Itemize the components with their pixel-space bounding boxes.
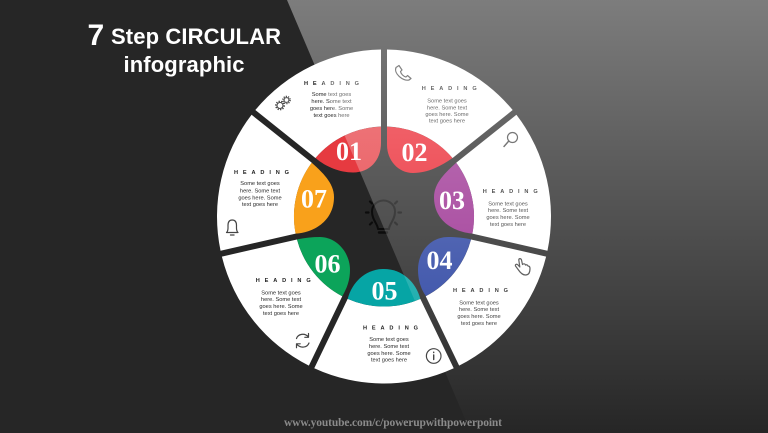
heading 05: HEADING	[363, 326, 418, 332]
panel: step 05	[293, 269, 454, 423]
heading 06: HEADING	[256, 278, 311, 284]
number 01: 01	[336, 137, 362, 166]
body text 01: here. Some text	[311, 99, 352, 105]
body text 03: here. Some text	[488, 208, 528, 214]
number 07: 07	[301, 184, 327, 214]
white segment 03	[432, 115, 595, 281]
heading 07: HEADING	[234, 170, 289, 176]
icon: phone	[396, 66, 411, 80]
footer url: www.youtube.com/c/powerupwithpowerpoint	[284, 417, 502, 429]
icon: magnifier	[504, 132, 518, 146]
title: infographic	[124, 52, 244, 77]
body text 02: here. Some text	[427, 106, 467, 112]
body text 06: here. Some text	[261, 297, 301, 303]
body text 03: goes here. Some	[486, 215, 530, 221]
number 02: 02	[402, 138, 428, 167]
title: Step CIRCULAR	[111, 24, 281, 49]
body text 05: here. Some text	[369, 344, 409, 350]
colored petal 02	[387, 127, 452, 173]
heading 04: HEADING	[453, 288, 508, 294]
body text 04: here. Some text	[459, 307, 499, 313]
white segment 04	[412, 232, 546, 379]
panel: step 04	[412, 232, 546, 379]
panel: step 01	[255, 12, 419, 178]
white segment 07	[193, 104, 326, 251]
body text 02: text goes here	[429, 118, 465, 124]
icon: gears	[276, 96, 290, 110]
body text 04: goes here. Some	[457, 314, 501, 320]
body text 02: Some text goes	[427, 98, 467, 104]
panel: step 06	[196, 213, 356, 366]
body text 06: text goes here	[263, 311, 299, 317]
icon: info	[426, 349, 441, 363]
title: 7	[88, 19, 104, 52]
heading 01: HEADING	[304, 81, 359, 87]
colored petal 05	[348, 269, 420, 307]
icon: central light bulb	[366, 200, 401, 232]
title	[88, 19, 281, 77]
body text 05: goes here. Some	[367, 351, 411, 357]
panel: step 03	[432, 115, 595, 281]
heading 03: HEADING	[483, 189, 538, 195]
icon: bell	[226, 220, 238, 235]
icon: refresh arrows	[296, 334, 309, 348]
number 04: 04	[426, 246, 452, 275]
body text 04: Some text goes	[459, 300, 499, 306]
white segment 02	[387, 50, 513, 158]
background light diagonal panel	[287, 0, 768, 433]
colored petal 06	[297, 237, 350, 296]
body text 07: goes here. Some	[238, 196, 282, 202]
colored petal 01	[316, 127, 381, 172]
colored petal 07	[294, 163, 334, 234]
body text 04: text goes here	[461, 321, 497, 327]
colored petal 04	[418, 237, 471, 296]
panel: step 07	[193, 104, 334, 251]
body text 02: goes here. Some	[425, 112, 469, 118]
body text 05: Some text goes	[369, 337, 409, 343]
body text 03: text goes here	[490, 222, 526, 228]
body text 07: here. Some text	[240, 188, 280, 194]
panel: step 02	[387, 50, 513, 173]
colored petal 03	[434, 163, 474, 234]
white segment 05	[293, 270, 454, 423]
body text 07: Some text goes	[240, 181, 280, 187]
body text 06: goes here. Some	[259, 304, 303, 310]
white segment 01	[255, 12, 419, 178]
icon: pointing hand	[515, 259, 530, 275]
number 06: 06	[314, 250, 340, 278]
heading 02: HEADING	[422, 86, 477, 92]
number 05: 05	[372, 276, 398, 306]
body text 06: Some text goes	[261, 290, 301, 296]
number 03: 03	[439, 186, 465, 215]
body text 01: text goes here	[313, 113, 350, 119]
body text 01: Some text goes	[312, 92, 351, 98]
body text 01: goes here. Some	[310, 106, 353, 112]
body text 03: Some text goes	[488, 202, 528, 208]
white segment 06	[196, 213, 356, 366]
body text 07: text goes here	[242, 202, 278, 208]
body text 05: text goes here	[371, 358, 407, 364]
